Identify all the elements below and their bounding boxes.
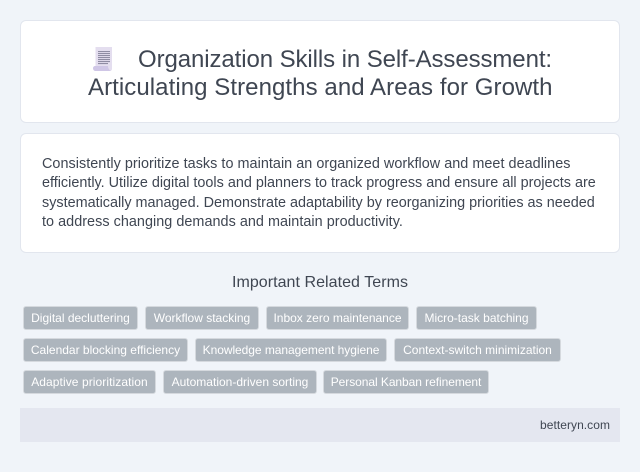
tag: Automation-driven sorting bbox=[172, 375, 308, 389]
title line 2: Articulating Strengths and Areas for Growth bbox=[88, 74, 553, 101]
tag bbox=[394, 338, 561, 362]
tag bbox=[323, 370, 489, 394]
description text: to address changing demands and maintain productivity. bbox=[42, 214, 403, 230]
tag bbox=[145, 306, 259, 330]
tag: Knowledge management hygiene bbox=[203, 343, 379, 357]
tag: Inbox zero maintenance bbox=[273, 311, 402, 325]
description text bbox=[42, 156, 596, 230]
tag: Context-switch minimization bbox=[403, 343, 552, 357]
icon: scroll document bbox=[93, 47, 112, 71]
tag: Micro-task batching bbox=[424, 311, 529, 325]
tag bbox=[266, 306, 409, 330]
tag bbox=[23, 306, 138, 330]
tag bbox=[416, 306, 537, 330]
tag bbox=[195, 338, 387, 362]
tag: Digital decluttering bbox=[31, 311, 130, 325]
tag: Personal Kanban refinement bbox=[331, 375, 481, 389]
title line 1: Organization Skills in Self-Assessment: bbox=[138, 46, 552, 73]
description text: Consistently prioritize tasks to maintain an organized workflow and meet deadlines bbox=[42, 156, 570, 172]
tag: Workflow stacking bbox=[154, 311, 250, 325]
panel: title card bbox=[20, 20, 620, 123]
footer bar bbox=[20, 408, 620, 442]
panel: description card bbox=[20, 133, 620, 253]
tag: Calendar blocking efficiency bbox=[31, 343, 180, 357]
heading: important related terms: Important Related Terms bbox=[232, 274, 408, 291]
tag list bbox=[23, 306, 561, 394]
description text: efficiently. Utilize digital tools and planners to track progress and ensure all projects are bbox=[42, 175, 596, 191]
tag bbox=[23, 370, 156, 394]
tag bbox=[23, 338, 188, 362]
tag bbox=[163, 370, 317, 394]
description text: systematically managed. Demonstrate adaptability by reorganizing priorities as needed bbox=[42, 195, 595, 211]
footer source text: betteryn.com bbox=[540, 418, 610, 432]
tag: Adaptive prioritization bbox=[31, 375, 148, 389]
